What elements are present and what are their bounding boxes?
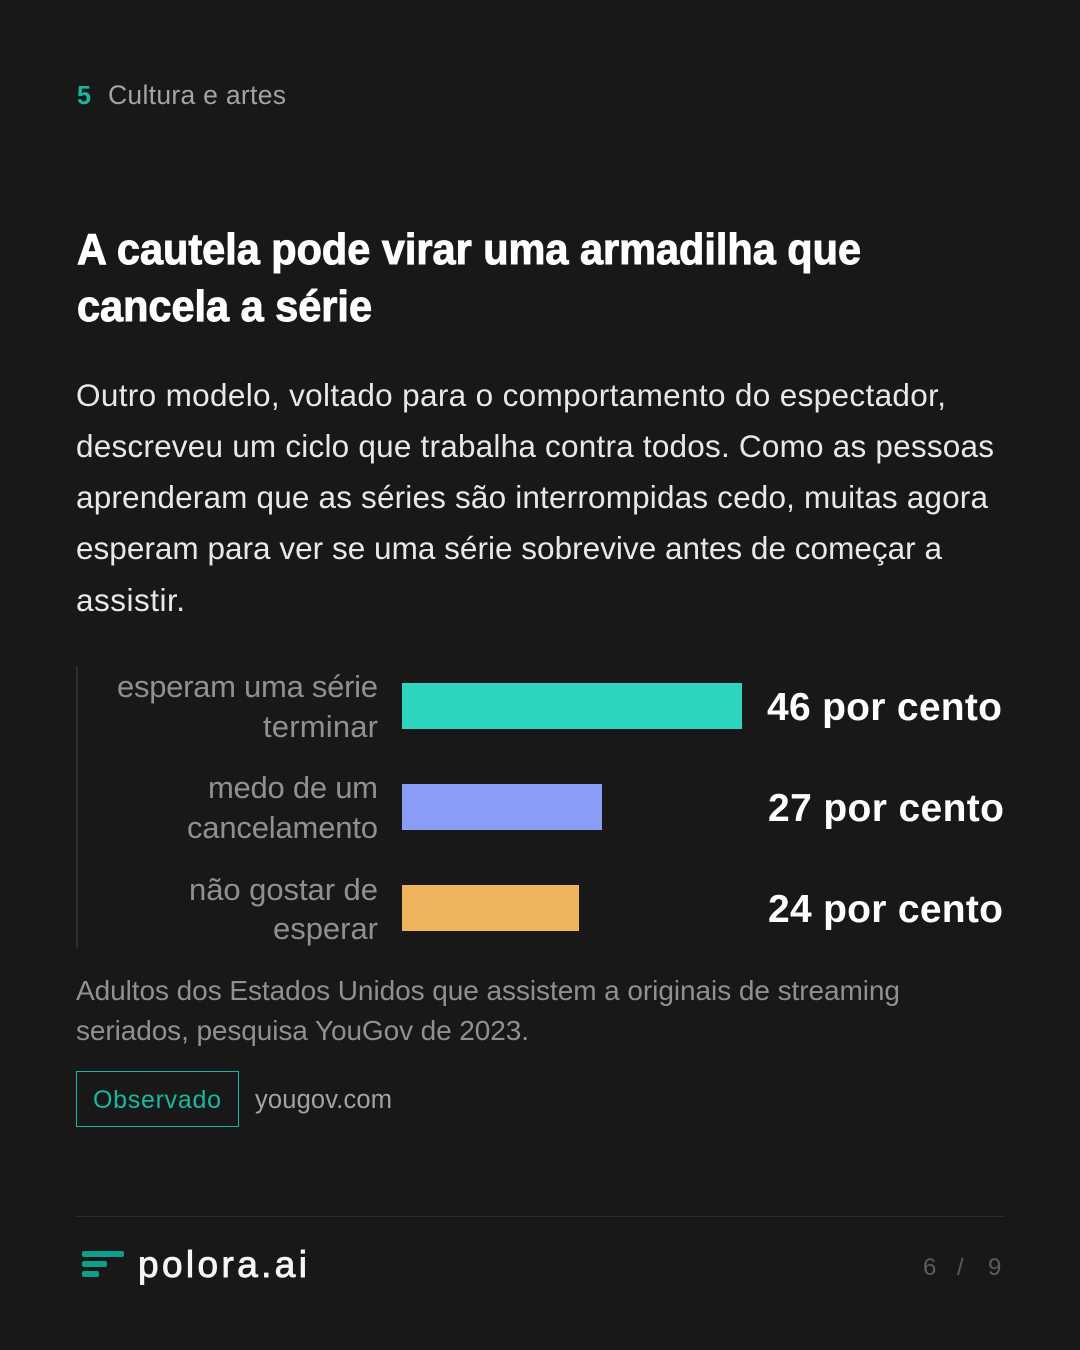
logo bbox=[82, 1244, 307, 1285]
title: cancela a série bbox=[77, 282, 372, 331]
page number bbox=[923, 1254, 1001, 1281]
title: A cautela pode virar uma armadilha que bbox=[77, 225, 861, 274]
row: esperam uma série terminar bbox=[117, 669, 1002, 744]
row: medo de um cancelamento: medo de um bbox=[208, 770, 378, 805]
body paragraph bbox=[76, 377, 994, 618]
icon: logo bars bbox=[82, 1251, 124, 1277]
body paragraph: assistir. bbox=[76, 582, 185, 618]
source note: Adultos dos Estados Unidos que assistem a originais de streaming bbox=[76, 975, 900, 1006]
title bbox=[77, 225, 861, 331]
badge: Observado bbox=[76, 1072, 238, 1126]
page number: 9 bbox=[988, 1254, 1001, 1281]
source note: seriados, pesquisa YouGov de 2023. bbox=[76, 1015, 529, 1046]
row: não gostar de esperar: esperar bbox=[273, 911, 378, 946]
page number: / bbox=[957, 1254, 964, 1281]
page number: 6 bbox=[923, 1254, 936, 1281]
row: esperam uma série terminar: terminar bbox=[263, 709, 378, 744]
section header: Cultura e artes bbox=[108, 80, 286, 110]
body paragraph: descreveu um ciclo que trabalha contra todos. Como as pessoas bbox=[76, 428, 994, 464]
body paragraph: aprenderam que as séries são interrompidas cedo, muitas agora bbox=[76, 479, 988, 515]
row: não gostar de esperar bbox=[189, 872, 1003, 946]
source link: yougov.com bbox=[255, 1086, 392, 1114]
row: medo de um cancelamento: 27 por cento bbox=[768, 787, 1004, 830]
wordmark: polora.ai bbox=[138, 1244, 307, 1285]
row: esperam uma série terminar: 46 por cento bbox=[767, 686, 1002, 729]
bar chart bbox=[76, 666, 1004, 948]
body paragraph: esperam para ver se uma série sobrevive antes de começar a bbox=[76, 530, 942, 566]
source note bbox=[76, 975, 900, 1046]
row: medo de um cancelamento bbox=[187, 770, 1004, 845]
row: medo de um cancelamento: cancelamento bbox=[187, 810, 378, 845]
body paragraph: Outro modelo, voltado para o comportamento do espectador, bbox=[76, 377, 946, 413]
section header: 5 bbox=[77, 80, 91, 110]
row: não gostar de esperar: 24 por cento bbox=[768, 888, 1003, 931]
row: esperam uma série terminar: esperam uma série bbox=[117, 669, 378, 704]
row: não gostar de esperar: não gostar de bbox=[189, 872, 378, 907]
badge: Observado: Observado bbox=[93, 1086, 221, 1114]
